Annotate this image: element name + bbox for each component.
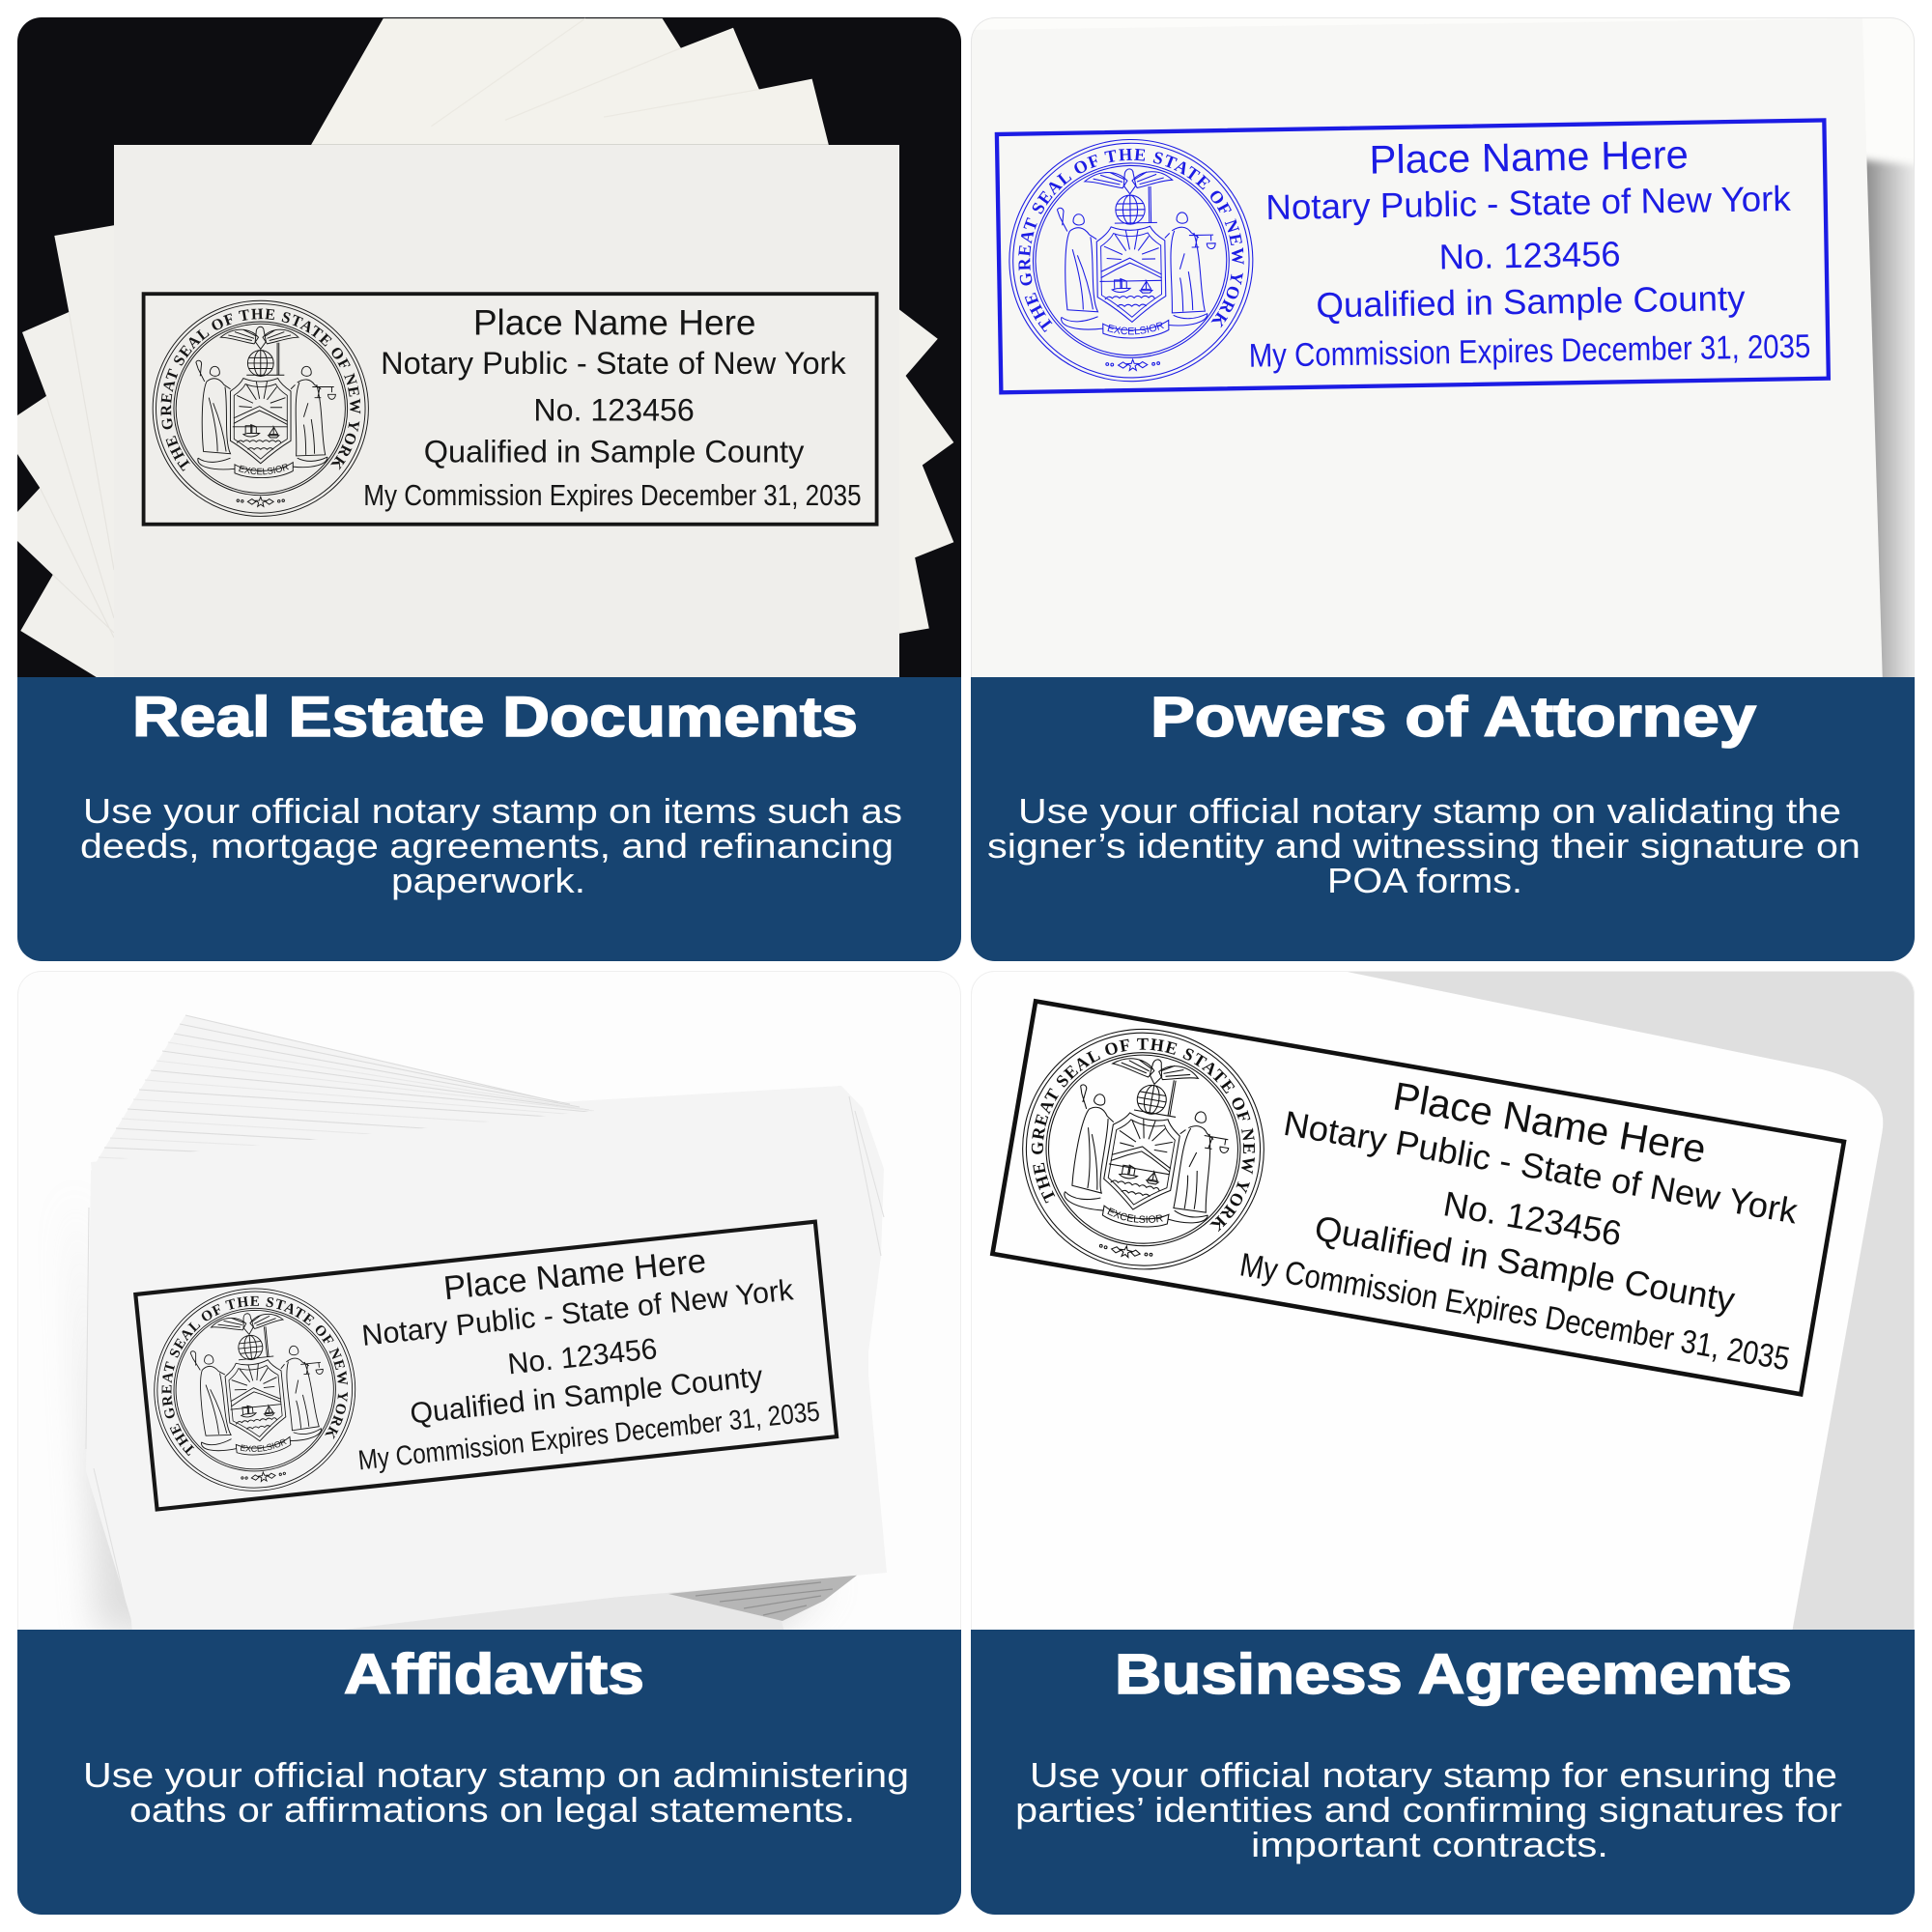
description: deeds, mortgage agreements, and refinancing (80, 826, 894, 866)
description: Use your official notary stamp for ensuring the (1030, 1755, 1837, 1795)
stamp: tilted black notary stamp: THE GREAT SEAL OF THE STATE OF NEW YORK (1032, 1037, 1255, 1233)
stamp: black notary stamp: Place Name Here (473, 302, 756, 342)
stamp: blue notary stamp: Notary Public - State of New York (1265, 179, 1792, 227)
stamp: black notary stamp: Notary Public - State of New York (381, 346, 846, 381)
stamp: blue notary stamp: No. 123456 (1438, 234, 1621, 276)
description: Use your official notary stamp on validating the (1018, 791, 1841, 831)
stamp: blue notary stamp: EXCELSIOR (1107, 323, 1164, 334)
stamp: tilted black notary stamp: Place Name Here (1390, 1074, 1709, 1172)
panel: powers of attorney (971, 17, 1915, 961)
stamp: black notary stamp: EXCELSIOR (239, 464, 289, 475)
stamp: black notary stamp: My Commission Expires December 31, 2035 (363, 479, 862, 512)
stamp: blue notary stamp: My Commission Expires December 31, 2035 (1248, 328, 1811, 375)
caption band (17, 1630, 961, 1915)
stamp: tilted black notary stamp (989, 999, 1847, 1397)
description (80, 791, 902, 900)
stamp: angled black notary stamp (133, 1219, 838, 1512)
caption band (971, 677, 1915, 961)
description (86, 1762, 906, 1830)
photo: stack of cards (17, 971, 961, 1630)
stamp: black notary stamp: Qualified in Sample County (424, 434, 805, 469)
stamp: tilted black notary stamp: Notary Public - State of New York (1281, 1103, 1802, 1232)
stamp: black notary stamp: THE GREAT SEAL OF THE STATE OF NEW YORK (160, 309, 361, 471)
caption band (971, 1630, 1915, 1915)
stamp: angled black notary stamp: My Commission Expires December 31, 2035 (356, 1396, 821, 1476)
stamp: blue notary stamp: Place Name Here (1369, 131, 1689, 183)
stamp: blue notary stamp: Qualified in Sample County (1316, 278, 1747, 326)
panel: real estate documents (17, 17, 961, 961)
caption band (17, 677, 961, 961)
heading: Business Agreements (1115, 1643, 1792, 1706)
stamp: tilted black notary stamp: My Commission Expires December 31, 2035 (1237, 1246, 1792, 1378)
stamp: black notary stamp (141, 292, 879, 526)
description: signer’s identity and witnessing their signature on (987, 826, 1861, 866)
description: POA forms. (1327, 861, 1522, 900)
photo: white card on grey (971, 971, 1915, 1630)
description: Use your official notary stamp on administering (83, 1755, 909, 1795)
heading: Real Estate Documents (132, 686, 858, 749)
heading: Affidavits (344, 1643, 644, 1706)
panel: affidavits (17, 971, 961, 1915)
photo: fanned white sheets on black (17, 17, 961, 684)
description (988, 798, 1859, 893)
stamp: angled black notary stamp: No. 123456 (506, 1332, 659, 1380)
stamp: angled black notary stamp: Notary Public - State of New York (360, 1273, 796, 1352)
stamp: angled black notary stamp: Place Name Here (442, 1242, 708, 1307)
description: important contracts. (1251, 1825, 1608, 1864)
stamp: blue notary stamp: THE GREAT SEAL OF THE STATE OF NEW YORK (1018, 149, 1244, 332)
stamp: tilted black notary stamp: No. 123456 (1440, 1183, 1625, 1254)
heading: Powers of Attorney (1151, 686, 1756, 749)
stamp: black notary stamp: No. 123456 (533, 393, 695, 428)
panel: business agreements (971, 971, 1915, 1915)
stamp: angled black notary stamp: THE GREAT SEAL OF THE STATE OF NEW YORK (162, 1296, 348, 1457)
stamp: blue notary stamp (995, 118, 1831, 394)
stamp: angled black notary stamp: EXCELSIOR (240, 1439, 287, 1452)
stamp: tilted black notary stamp: Qualified in Sample County (1312, 1208, 1739, 1320)
photo: textured sheet with shadow (971, 17, 1915, 677)
stamp: angled black notary stamp: Qualified in Sample County (409, 1360, 765, 1431)
description: paperwork. (391, 861, 585, 900)
description (1015, 1755, 1842, 1864)
stamp: tilted black notary stamp: EXCELSIOR (1107, 1208, 1163, 1223)
description: Use your official notary stamp on items such as (83, 791, 902, 831)
description: oaths or affirmations on legal statements. (129, 1790, 855, 1830)
description: parties’ identities and confirming signatures for (1015, 1790, 1842, 1830)
